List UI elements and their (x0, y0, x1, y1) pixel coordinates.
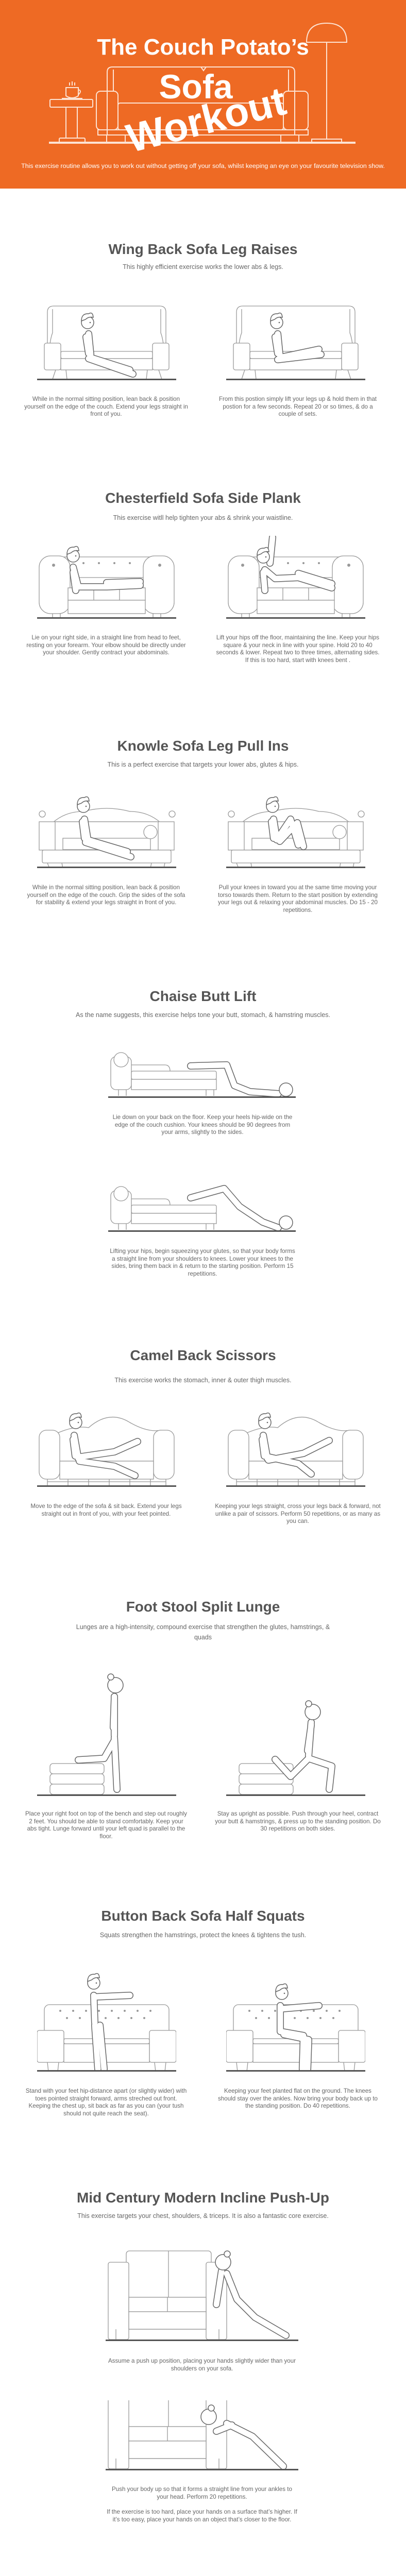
heading: Chesterfield Sofa Side Plank (105, 490, 301, 506)
illustration: lunge (226, 1700, 365, 1796)
caption 2: Push your body up so that it forms a straight line from your ankles to your head. Perform 20 repetitions. (112, 2486, 292, 2500)
section: Chesterfield Sofa Side Plank (26, 490, 380, 664)
header banner (0, 0, 406, 189)
caption left: Move to the edge of the sofa & sit back. Extend your legs straight out in front of you, with your feet pointed. (30, 1503, 182, 1517)
heading: Wing Back Sofa Leg Raises (109, 241, 297, 257)
heading: Chaise Butt Lift (150, 988, 256, 1004)
heading: Camel Back Scissors (130, 1347, 276, 1363)
section: Foot Stool Split Lunge (25, 1599, 381, 1839)
caption 1: Assume a push up position, placing your hands slightly wider than your shoulders on your sofa. (108, 2358, 296, 2372)
subtitle: This exercise works the stomach, inner & outer thigh muscles. (114, 1377, 292, 1384)
heading: Mid Century Modern Incline Push-Up (77, 2190, 329, 2206)
illustration: lying, heels on chaise (108, 1052, 296, 1098)
section: Wing Back Sofa Leg Raises (24, 241, 377, 417)
header illustration: sofa, table, lamp (49, 23, 356, 144)
illustration: legs extended (37, 796, 176, 868)
header title: Sofa: Sofa (159, 67, 233, 106)
caption right: Stay as upright as possible. Push through your heel, contract your butt & hamstrings, & press up to the standing position. Do 30 repetitions on both sides. (215, 1810, 381, 1832)
heading: Knowle Sofa Leg Pull Ins (117, 738, 289, 754)
header title: The Couch Potato’s (97, 35, 309, 60)
subtitle: Squats strengthen the hamstrings, protect the knees & tightens the tush. (100, 1931, 306, 1939)
caption right: Keeping your legs straight, cross your legs back & forward, not unlike a pair of scissors. Perform 50 repetitions, or as many as you can. (215, 1503, 381, 1524)
illustration: legs straight (37, 1413, 176, 1487)
illustration: half squat (226, 1984, 365, 2072)
illustration: legs crossed (226, 1413, 365, 1487)
subtitle: This highly efficient exercise works the lower abs & legs. (123, 263, 283, 270)
subtitle: This exercise witll help tighten your abs & shrink your waistline. (113, 514, 293, 521)
heading: Button Back Sofa Half Squats (101, 1908, 305, 1924)
illustration: side lying (37, 546, 176, 619)
caption left: Place your right foot on top of the bench and step out roughly 2 feet. You should be able to stand comfortably. Keep your abs tight. Lunge forward until your left quad is parallel to the floor. (25, 1810, 187, 1839)
caption left: Lie on your right side, in a straight line from head to feet, resting on your forearm. Your elbow should be directly under your shoulder. Gently contract your abdominals. (26, 634, 186, 656)
header title: Workout: Workout (122, 78, 290, 161)
illustration: legs raised (226, 306, 365, 380)
section: Button Back Sofa Half Squats (26, 1908, 378, 2116)
subtitle: As the name suggests, this exercise helps tone your butt, stomach, & hamstring muscles. (76, 1011, 330, 1019)
caption left: Stand with your feet hip-distance apart (or slightly wider) with toes pointed straight forward, arms streched out front. Keeping the chest up, sit back as far as you can (your tush should not quite reach the seat). (26, 2088, 187, 2116)
caption right: Pull your knees in toward you at the same time moving your torso towards them. Return to the start position by extending your legs out & relaxing your abdominal muscles. Do 15 - 20 repetitions. (218, 884, 378, 913)
section: Mid Century Modern Incline Push-Up (77, 2190, 329, 2522)
caption 1: Lie down on your back on the floor. Keep your heels hip-wide on the edge of the couch cushion. Your knees should be 90 degrees from your arms, slightly to the sides. (113, 1114, 292, 1136)
illustration: standing arms out (37, 1973, 176, 2072)
illustration: standing with foot on stool (37, 1673, 176, 1796)
illustration: push-up start (106, 2250, 298, 2341)
illustration: sitting, legs extended (37, 306, 176, 380)
caption left: While in the normal sitting position, lean back & position yourself on the edge of the couch. Grip the sides of the sofa for stability & extend your legs straight in front of you. (27, 884, 185, 906)
illustration: knees pulled in (226, 796, 365, 868)
illustration: side plank, arm raised (226, 536, 365, 619)
caption 2: Lifting your hips, begin squeezing your glutes, so that your body forms a straight line from your shoulders to knees. Lower your knees to the sides, bring them back in & return to the starting position. Perform 15 repetitions. (110, 1248, 295, 1277)
caption right: From this postion simply lift your legs up & hold them in that postion for a few seconds. Repeat 20 or so times, & do a couple of sets. (219, 396, 377, 417)
subtitle: This is a perfect exercise that targets your lower abs, glutes & hips. (107, 761, 299, 768)
illustration: push-up down (106, 2400, 298, 2470)
heading: Foot Stool Split Lunge (126, 1599, 280, 1615)
caption 3: If the exercise is too hard, place your hands on a surface that’s higher. If it’s too easy, place your hands on an object that’s closer to the floor. (107, 2509, 297, 2522)
section: Camel Back Scissors (30, 1347, 381, 1524)
section: Chaise Butt Lift (76, 988, 330, 1277)
subtitle: This exercise targets your chest, shoulders, & triceps. It is also a fantastic core exercise. (77, 2212, 329, 2219)
illustration: hips lifted (108, 1185, 296, 1232)
header intro text: This exercise routine allows you to work out without getting off your sofa, whilst keeping an eye on your favourite television show. (21, 162, 385, 170)
section: Knowle Sofa Leg Pull Ins (27, 738, 378, 913)
subtitle: Lunges are a high-intensity, compound exercise that strengthen the glutes, hamstrings, & quads (76, 1623, 330, 1641)
caption right: Lift your hips off the floor, maintaining the line. Keep your hips square & your neck in line with your spine. Hold 20 to 40 seconds & lower. Repeat two to three times, alternating sides. If this is too hard, start with knees bent . (216, 634, 380, 664)
caption right: Keeping your feet planted flat on the ground. The knees should stay over the ankles. Now bring your body back up to the standing position. Do 40 repetitions. (218, 2088, 378, 2109)
caption left: While in the normal sitting position, lean back & position yourself on the edge of the couch. Extend your legs straight in front of you. (24, 396, 188, 417)
